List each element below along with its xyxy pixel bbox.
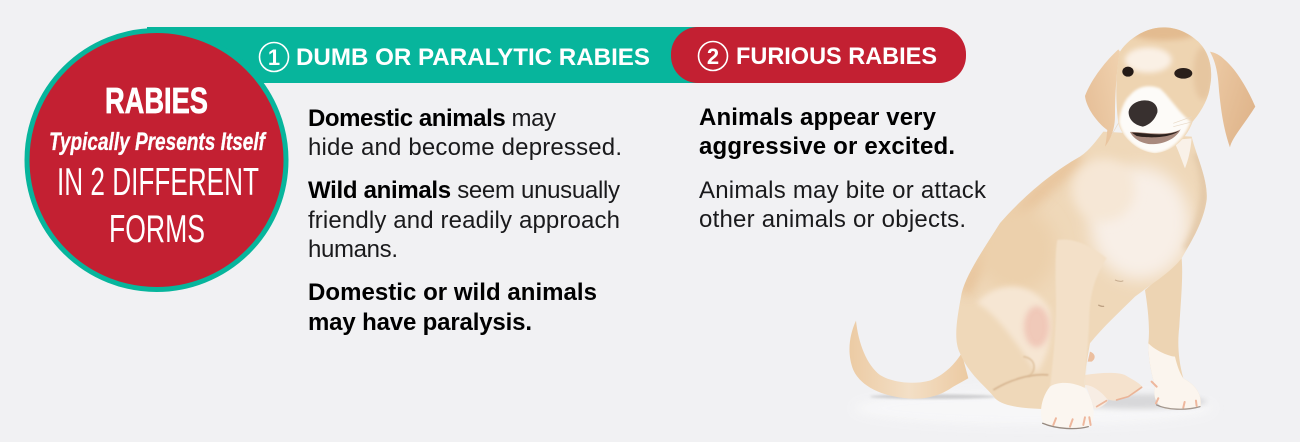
- header band: dumb or paralytic rabies: [147, 27, 717, 83]
- number badge 1: 1: [268, 45, 280, 70]
- paw details: [1043, 382, 1200, 429]
- left ear: [1085, 49, 1120, 147]
- text block: dumb rabies signs: Wild animals seem unusually: [308, 177, 620, 204]
- text block: dumb rabies signs: humans.: [308, 236, 398, 263]
- text block: dumb rabies signs: hide and become depressed.: [308, 134, 622, 161]
- floor shadow: [853, 392, 1213, 425]
- heading: furious rabies: FURIOUS RABIES: [736, 43, 937, 70]
- text: in 2 different forms: [57, 161, 259, 251]
- text block: dumb rabies signs: Domestic or wild animals: [308, 279, 597, 306]
- far hind paw: [1085, 373, 1143, 401]
- mouth: [1130, 129, 1181, 144]
- nose: [1129, 100, 1157, 127]
- title badge circle: [27, 30, 286, 290]
- title: rabies: RABIES: [105, 80, 208, 121]
- text block: dumb rabies signs: friendly and readily approach: [308, 207, 620, 234]
- text block: furious rabies signs: Animals appear very: [699, 104, 937, 131]
- whiskers: [1112, 117, 1193, 135]
- text block: dumb rabies signs: may have paralysis.: [308, 309, 532, 336]
- face markings: [1119, 23, 1213, 153]
- number badge 2: 2: [707, 44, 719, 69]
- right ear: [1210, 52, 1255, 147]
- text: in 2 different forms: FORMS: [109, 208, 205, 251]
- text block: furious rabies signs: other animals or objects.: [699, 206, 966, 233]
- eyes: [1122, 67, 1192, 79]
- text: in 2 different forms: IN 2 DIFFERENT: [57, 161, 259, 204]
- haunch highlight: [977, 287, 1051, 373]
- far foreleg: [1145, 258, 1201, 409]
- number badge 1: [260, 42, 288, 72]
- subtitle: typically presents itself: Typically Presents Itself: [49, 128, 267, 156]
- heading: dumb or paralytic rabies: DUMB OR PARALYTIC RABIES: [296, 44, 650, 71]
- far paw pad near knee: [1088, 352, 1095, 362]
- body: [956, 132, 1207, 409]
- body shading: [963, 153, 1204, 390]
- text block: furious rabies signs: aggressive or excited.: [699, 133, 955, 160]
- head: [1116, 27, 1211, 153]
- text block: furious rabies signs: [699, 104, 987, 233]
- far foreleg white sock: [1148, 343, 1201, 409]
- near front paw: [1041, 383, 1094, 428]
- text block: dumb rabies signs: [308, 105, 622, 336]
- tail: [849, 321, 968, 399]
- near foreleg: [1050, 239, 1107, 388]
- throat ruff: [1173, 138, 1192, 168]
- text block: dumb rabies signs: Domestic animals may: [308, 105, 556, 132]
- number badge 2: [698, 42, 728, 70]
- text block: furious rabies signs: Animals may bite or attack: [699, 177, 987, 204]
- header pill: furious rabies: [671, 27, 966, 83]
- illustration: puppy: [849, 23, 1255, 429]
